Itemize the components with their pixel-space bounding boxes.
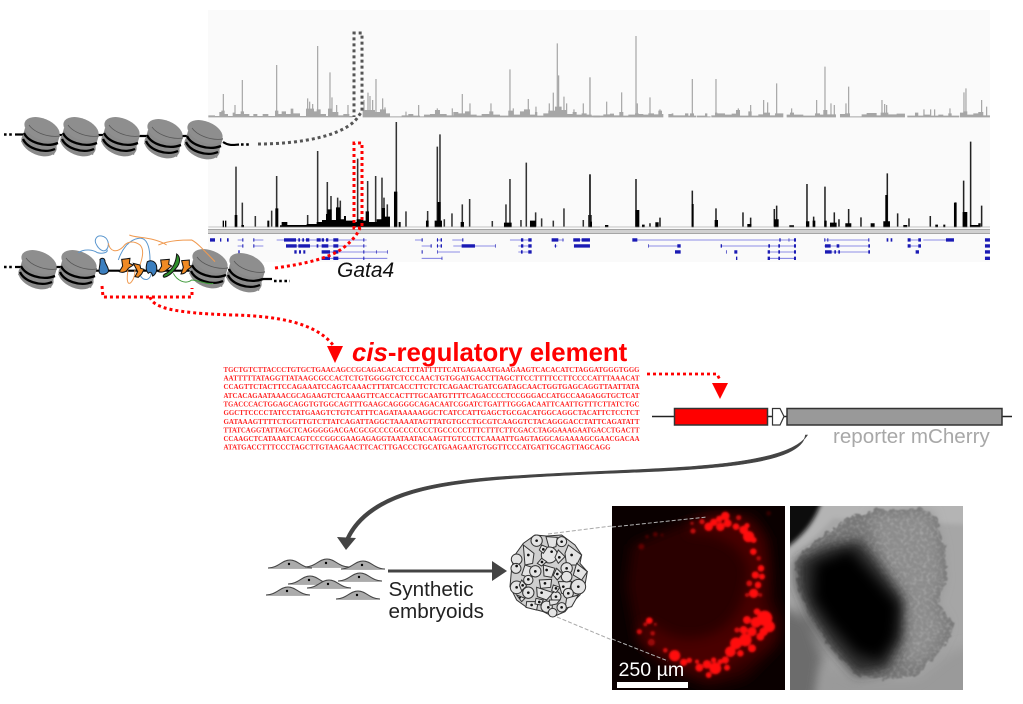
DNA sequence block: ATATGACCTTTCCCTAGCTTGTAAGAACTTCACTTGACCCTGCATGAAGAATGTGGTTCCCATGATTGCAGTTAGCAGG [224,444,611,452]
brightfield micrograph [790,506,963,690]
cells monolayer [266,559,385,599]
thin tails: green [173,273,213,284]
DNA sequence block: GATAAAGTTTTCTGGTTGTCTTATCAGATTAGGCTAAAATAGTTATGTGCCTGCGTCAAGGTCTACAGGGACCTATTCAGATATT [224,418,640,426]
blue factors [99,258,157,276]
chart: grey accessibility track [208,36,990,117]
fluorescence micrograph [612,506,785,690]
DNA sequence block [224,366,640,452]
dotted link: open chromatin to black track [275,143,362,268]
DNA sequence block: AATTTTTATAGGTTATAAGCGCCACTCTGTGGGGTCTCCCAACTGTGGATGACCTTAGCTTCCTTTTCCTTCCCCATTTAAACAT [224,375,640,383]
DNA sequence block: ATCACAGAATAAACGCAGAAGTCTCAAAGTTCACCACTTTGCAATGTTTTCAGACCCCTCCGGGACCATGCCAAGAGGTGCTCAT [224,392,640,400]
label: Synthetic embryoids: embryoids [388,600,484,623]
dotted arrow: open region to cis-regulatory element [102,286,343,363]
label: Gata4: Gata4 [337,259,394,282]
green factor [163,254,180,277]
thin tails: blue [78,236,151,279]
DNA sequence block: TGACCCACTGGAGCAGGTGTGGCAGTTTGAAGCAGGGGCAGACAATCGGATCTGATTTGGGACAATTCAATTGTTTCTTATCTGC [224,400,640,408]
arrow: cells to embryoid [388,561,507,581]
heading: cis-regulatory element: cis-regulatory element [352,339,628,367]
dashed zoom lines inside micrograph [612,517,707,661]
panel: genome browser background [208,10,990,262]
track divider [208,229,990,234]
open chromatin with transcription factors [4,235,290,297]
gene annotation track [210,240,990,258]
label: Synthetic embryoids: Synthetic [388,578,474,601]
DNA sequence block: TGCTGTCTTACCCTGTGCTGAACAGCCGCAGACACACTTTATTTTTCATGAGAAATGAAGAAGTCACACATCTAGGATGGGTGGG [224,366,640,374]
DNA sequence block: CCAAGCTCATAAATCAGTCCCGGCGAAGAGAGGTAATAATACAAGTTGTCCCTCAAAATTGAGTAGGCAGAAAAGCGAACGACAA [224,435,640,443]
curved arrow: construct to cells [337,435,808,550]
dotted link: closed chromatin to grey track [258,33,362,144]
closed chromatin nucleosome array [4,112,251,164]
scale bar and label: 250 µm [618,659,684,681]
chart: black accessibility track [208,122,990,227]
reporter construct diagram [652,408,1012,425]
dashed zoom lines [548,526,612,640]
DNA sequence block: CCAGTTCTACTTCCAGAAATCCAGTCAAACTTTATCACCTTCTCTCAGAACTGATCGATAGCAACTGGTGAGCAGGTTAATTATA [224,383,640,391]
DNA sequence block: TTATCAGGTATTAGCTCAGGGGGACGACGCGCCCCGCCCCCCCTGCCCCCTTTCTTTCTTCGACCTAGGAAAGAATGACCTGACTT [224,426,640,434]
DNA sequence block: GGCTTCCCCTATCCTATGAAGTCTGTCATTTCAGATAAAAAGGCTCATCCATTGAGCTGCGACATGGCAGGCTACATTCTCCTCT [224,409,640,417]
thin tails: orange [108,235,215,283]
dotted arrow: sequence to construct [647,374,728,399]
orange factors [119,258,192,277]
embryoid cell cluster [510,535,587,617]
label: reporter mCherry: reporter mCherry [833,425,990,448]
